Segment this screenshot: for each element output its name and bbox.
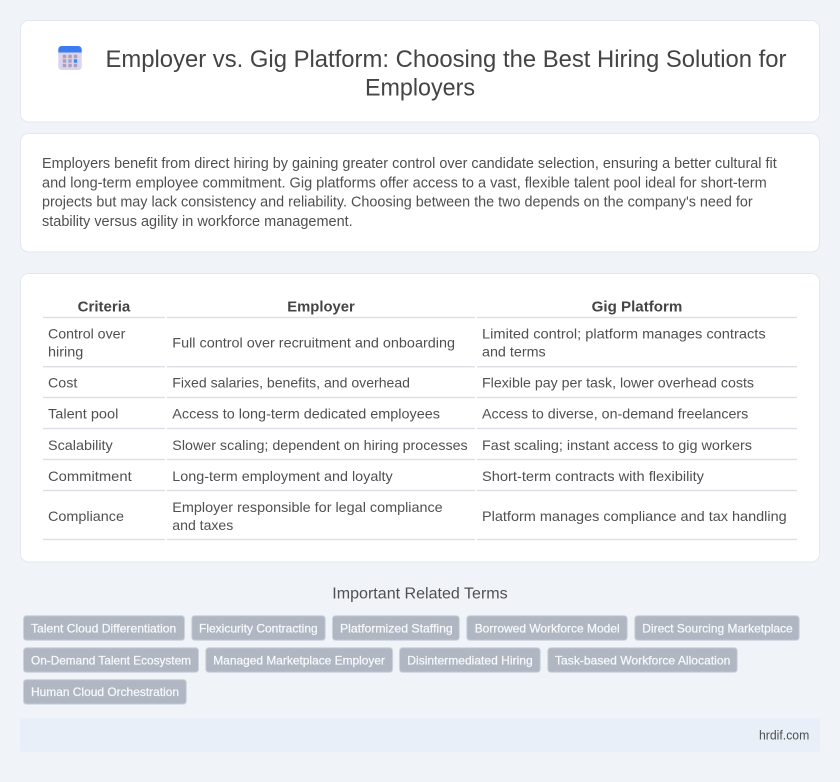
table header row [43, 299, 797, 318]
tag: Talent Cloud Differentiation [31, 621, 176, 635]
row: commitment: Commitment [48, 468, 132, 484]
tag: On-Demand Talent Ecosystem [31, 653, 191, 667]
panel: summary text: stability versus agility in workforce management. [42, 214, 353, 230]
icon: calendar [58, 46, 82, 70]
tag: Flexicurity Contracting [199, 621, 318, 635]
row: compliance: Compliance [48, 508, 124, 524]
row: control over hiring: Control over [48, 325, 126, 341]
row: scalability: Slower scaling; dependent on hiring processes [172, 437, 468, 453]
row: compliance: Platform manages compliance and tax handling [482, 508, 787, 524]
row: control over hiring: and terms [482, 343, 546, 359]
row: talent pool: Talent pool [48, 406, 118, 422]
tag [400, 648, 540, 672]
panel: summary text: Employers benefit from direct hiring by gaining greater control over candidate selection, ensuring a better cultural fit [42, 156, 777, 172]
tag: Direct Sourcing Marketplace [642, 621, 793, 635]
tag: Platformized Staffing [340, 621, 453, 635]
panel: summary text: projects but may lack consistency and reliability. Choosing between the two depends on the company's need for [42, 195, 753, 211]
tag: Task-based Workforce Allocation [555, 653, 730, 667]
table header row: Gig Platform [592, 299, 682, 316]
heading: important related terms: Important Related Terms [332, 585, 508, 602]
tag [192, 616, 325, 640]
row: control over hiring: Limited control; platform manages contracts [482, 325, 766, 341]
tag [467, 616, 627, 640]
row: scalability: Scalability [48, 437, 113, 453]
row: cost: Fixed salaries, benefits, and overhead [172, 375, 410, 391]
tag [332, 616, 459, 640]
tag [548, 648, 737, 672]
title [106, 46, 786, 102]
tag: Managed Marketplace Employer [213, 653, 385, 667]
tag: Human Cloud Orchestration [31, 685, 179, 699]
row: compliance [43, 499, 797, 540]
table header row: Employer [287, 299, 355, 316]
tag [206, 648, 393, 672]
tag [24, 680, 186, 704]
row: scalability [43, 437, 797, 460]
footer [20, 718, 820, 752]
tag [24, 648, 198, 672]
panel: summary text: and long-term employee commitment. Gig platforms offer access to a vast, flexible talent pool ideal for short-term [42, 175, 767, 191]
row: scalability: Fast scaling; instant access to gig workers [482, 437, 752, 453]
tag [24, 616, 184, 640]
title: Employer vs. Gig Platform: Choosing the Best Hiring Solution for [106, 46, 786, 73]
panel: related term tags [24, 616, 799, 704]
panel: header [20, 20, 820, 122]
row: cost [43, 375, 797, 398]
row: cost: Cost [48, 375, 77, 391]
panel: summary text [20, 134, 820, 252]
row: commitment: Short-term contracts with flexibility [482, 468, 704, 484]
row: control over hiring: Full control over recruitment and onboarding [172, 335, 455, 351]
row: talent pool [43, 406, 797, 429]
row: compliance: and taxes [172, 517, 233, 533]
tag [635, 616, 799, 640]
row: talent pool: Access to diverse, on-demand freelancers [482, 406, 748, 422]
row: compliance: Employer responsible for legal compliance [172, 499, 443, 515]
row: commitment: Long-term employment and loyalty [172, 468, 393, 484]
row: control over hiring: hiring [48, 343, 83, 359]
row: control over hiring [43, 325, 797, 367]
title: Employers [365, 74, 475, 102]
footer: hrdif.com [759, 728, 809, 742]
tag: Disintermediated Hiring [407, 653, 533, 667]
tag: Borrowed Workforce Model [475, 621, 620, 635]
row: cost: Flexible pay per task, lower overhead costs [482, 375, 754, 391]
panel: comparison table [20, 274, 820, 562]
row: talent pool: Access to long-term dedicated employees [172, 406, 440, 422]
table header row: Criteria [78, 299, 131, 316]
row: commitment [43, 468, 797, 491]
